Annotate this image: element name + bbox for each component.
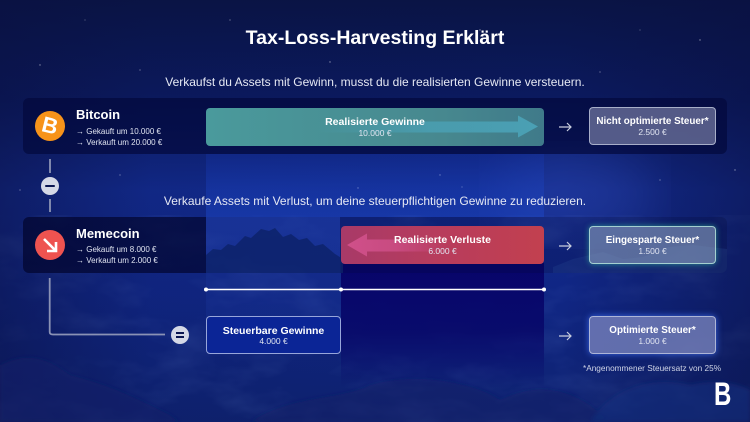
panel: memecoin row	[23, 217, 727, 273]
bitcoin trades	[76, 126, 162, 146]
box: optimized tax	[589, 316, 716, 354]
footnote: *Angenommener Steuersatz von 25%	[583, 364, 721, 373]
arrow to untaxed box	[559, 122, 572, 132]
box: saved tax: 1.500 €	[638, 246, 667, 256]
box: saved tax	[589, 226, 716, 264]
icon: bitcoin: B	[39, 111, 61, 140]
panel: bitcoin row	[23, 98, 727, 154]
box: taxable gains	[206, 316, 341, 354]
logo: B	[714, 376, 731, 412]
box: optimized tax: 1.000 €	[638, 336, 667, 346]
arrow to saved box	[559, 242, 572, 250]
arrow to optimized box	[559, 332, 572, 340]
box: non-optimized tax: 2.500 €	[638, 127, 667, 137]
connector: minus to memecoin	[49, 199, 51, 212]
connector: memecoin to equals	[48, 278, 165, 336]
memecoin trades	[76, 244, 158, 264]
bitcoin heading: Bitcoin	[76, 107, 120, 122]
bar: realized losses: Realisierte Verluste	[394, 234, 491, 246]
bar: realized gains: 10.000 €	[358, 128, 392, 138]
bar: realized losses: 6.000 €	[428, 246, 457, 256]
intro text: losses: Verkaufe Assets mit Verlust, um deine steuerpflichtigen Gewinne zu reduzieren.	[164, 194, 586, 208]
mountain range	[206, 228, 727, 273]
bar: realized gains: Realisierte Gewinne	[325, 116, 425, 128]
bitcoin trades: → Gekauft um 10.000 €	[76, 126, 161, 136]
icon: equals	[171, 326, 189, 344]
box: non-optimized tax: Nicht optimierte Steuer*	[596, 116, 709, 126]
column shading bands	[206, 154, 544, 217]
icon: left arrow in bar	[347, 234, 434, 256]
box: taxable gains: 4.000 €	[259, 336, 288, 346]
box: saved tax: Eingesparte Steuer*	[606, 234, 699, 246]
bar: realized losses	[341, 226, 544, 264]
title: Tax-Loss-Harvesting Erklärt	[246, 27, 504, 49]
memecoin trades: → Verkauft um 2.000 €	[76, 256, 158, 264]
icon: memecoin down arrow	[35, 230, 65, 260]
box: optimized tax: Optimierte Steuer*	[609, 324, 696, 336]
connector: bitcoin to minus	[49, 159, 51, 173]
icon: minus	[41, 177, 59, 195]
memecoin trades: → Gekauft um 8.000 €	[76, 244, 156, 254]
bar: realized gains	[206, 108, 544, 146]
intro text: gains: Verkaufst du Assets mit Gewinn, musst du die realisierten Gewinne versteuern.	[165, 75, 585, 89]
icon: right arrow in bar	[352, 116, 538, 138]
sum line	[204, 288, 546, 292]
box: non-optimized tax	[589, 107, 716, 145]
icon: bitcoin	[35, 111, 65, 141]
bitcoin trades: → Verkauft um 20.000 €	[76, 138, 162, 146]
box: taxable gains: Steuerbare Gewinne	[223, 324, 324, 336]
memecoin heading: Memecoin	[76, 226, 140, 241]
